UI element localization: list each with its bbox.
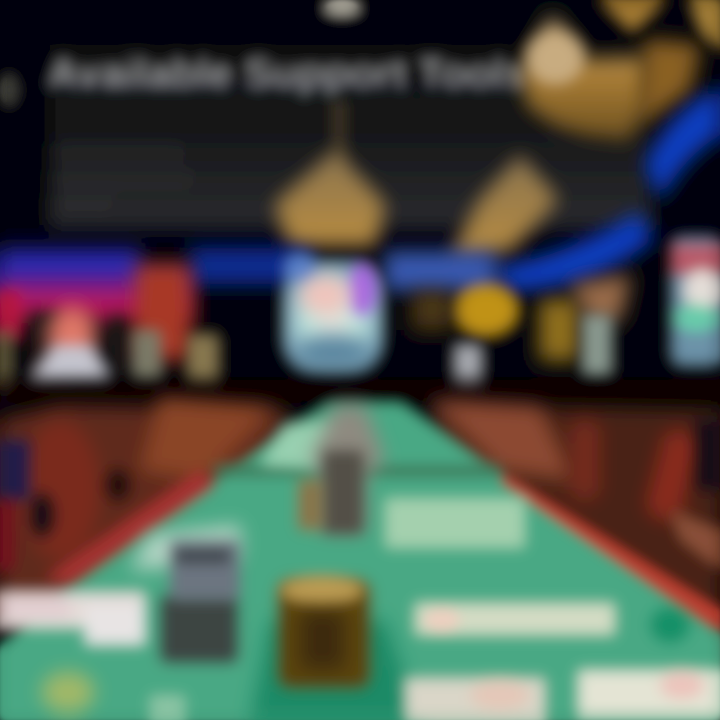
chip stack: far centre	[298, 405, 385, 535]
blue banner	[0, 88, 720, 290]
slot machine: far right screen	[672, 238, 720, 365]
chandelier: centre	[275, 100, 385, 245]
carpet: left	[0, 398, 290, 620]
cards: bottom right	[405, 670, 720, 720]
table red rail: left	[45, 470, 215, 584]
table red rail: right	[500, 475, 720, 632]
left edge glint	[0, 74, 18, 106]
betting area: mid	[385, 498, 525, 548]
pale marker	[150, 695, 185, 720]
title: Available Support Tools	[48, 50, 528, 96]
table band	[215, 465, 500, 477]
cards: right row	[415, 603, 615, 635]
chip stack: grey	[160, 540, 240, 663]
betting area: pale strip left	[130, 525, 240, 570]
darker green lower table	[250, 620, 420, 720]
slot machine: yellow right	[412, 275, 630, 390]
slot machine: centre screen	[284, 254, 382, 370]
ceiling light	[324, 0, 360, 16]
slot machine: pink left	[0, 265, 218, 390]
dark header panel	[0, 45, 720, 247]
yellow chip marker	[42, 672, 94, 712]
betting area: far	[260, 420, 345, 470]
subtitle text	[55, 145, 195, 210]
chandelier: right	[450, 155, 558, 258]
floor shadow band	[0, 380, 720, 400]
chandelier: top right	[522, 0, 720, 140]
green table	[0, 405, 720, 720]
chip stack: gold	[278, 576, 370, 688]
cards: left	[0, 592, 145, 645]
carpet: right	[430, 400, 720, 660]
